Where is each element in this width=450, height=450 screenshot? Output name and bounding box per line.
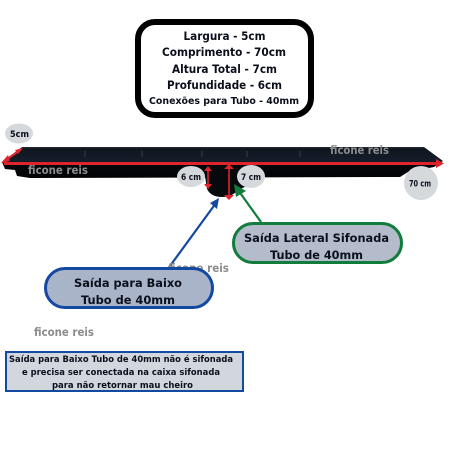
label: 5cm (5, 124, 33, 144)
drain channel body (2, 147, 443, 178)
label: 7 cm: 7 cm (241, 173, 261, 183)
callout: bottom outlet (46, 268, 212, 308)
specifications box (138, 22, 311, 115)
ribs (85, 151, 300, 157)
spec: total height: Altura Total - 7cm (172, 62, 277, 76)
arrow: blue to bottom outlet (170, 198, 219, 266)
spec: depth: Profundidade - 6cm (167, 78, 282, 92)
product: linear drain (2, 147, 443, 197)
spec: connections: Conexões para Tubo - 40mm (149, 96, 299, 107)
label: 6 cm: 6 cm (181, 173, 201, 183)
watermark: over bar right: ficone reis (330, 143, 389, 157)
note box: warning: Saída para Baixo Tubo de 40mm não é sifonada (9, 354, 233, 365)
dimension: red depth arrow 6 cm (204, 166, 212, 189)
note box: warning: para não retornar mau cheiro (52, 381, 193, 391)
label: 5cm: 5cm (10, 130, 29, 140)
watermark: over bar left: ficone reis (28, 163, 88, 177)
callout: side siphon outlet: Saída Lateral Sifonada (244, 231, 389, 245)
spec: length: Comprimento - 70cm (162, 45, 286, 59)
callout: side siphon outlet: Tubo de 40mm (270, 248, 363, 262)
note box: warning (6, 352, 243, 391)
watermark: centre: ficone reis (168, 261, 229, 275)
arrow: green to side outlet (234, 184, 261, 222)
box frame (138, 22, 311, 115)
label: 7 cm (237, 165, 265, 188)
dimension: red height arrow 7 cm (224, 164, 234, 200)
callout: side siphon outlet (234, 224, 402, 262)
callout: bottom outlet: Tubo de 40mm (81, 293, 175, 307)
label: 6 cm (177, 166, 205, 187)
label: 70 cm (404, 166, 438, 200)
dimension: red length line 70 cm (4, 159, 444, 168)
label: 70 cm: 70 cm (409, 180, 431, 190)
watermark: lower left: ficone reis (34, 325, 94, 339)
dimension: red width arrow 5 cm (1, 148, 23, 163)
callout: bottom outlet: Saída para Baixo (74, 276, 182, 290)
spec: width: Largura - 5cm (184, 29, 266, 43)
note box: warning: e precisa ser conectada na caixa sifonada (22, 368, 220, 378)
drain outlet connector (205, 165, 247, 197)
